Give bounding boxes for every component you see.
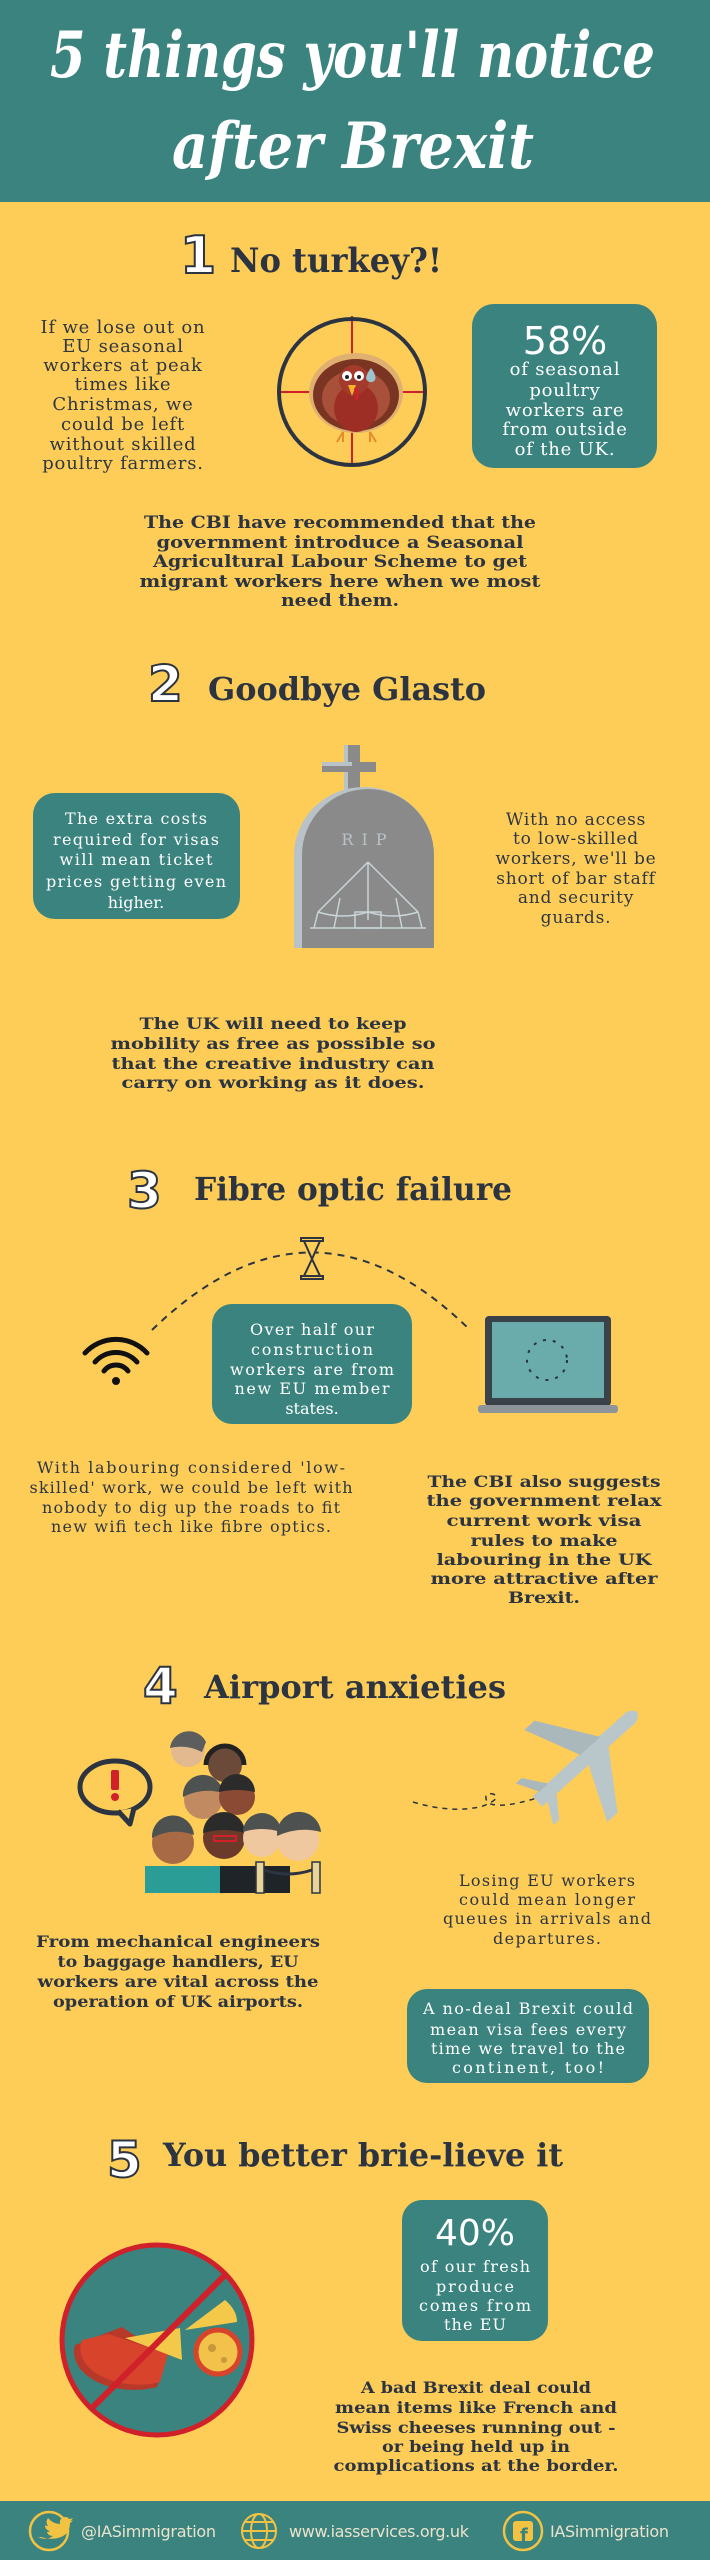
text: CBI work visa: labouring in the UK bbox=[436, 1550, 653, 1569]
icon: twitter bbox=[30, 2512, 73, 2550]
text: airport workers: From mechanical engineers bbox=[36, 1932, 320, 1951]
text: seasonal workers: workers at peak bbox=[43, 355, 203, 376]
title: after Brexit bbox=[172, 109, 534, 184]
text: labouring low-skilled: skilled' work, we could be left with bbox=[30, 1478, 352, 1497]
stat box: 40%: of our fresh bbox=[420, 2257, 530, 2276]
box: construction workers: workers are from bbox=[230, 1360, 394, 1379]
box: no-deal visa fees: A no-deal Brexit could bbox=[422, 1999, 633, 2018]
icon: airplane with dashed trail bbox=[413, 1666, 679, 1850]
section 5 heading bbox=[107, 2131, 563, 2189]
header banner bbox=[0, 0, 710, 202]
box: no-deal visa fees: mean visa fees every bbox=[430, 2020, 626, 2039]
section 2 heading: 2 bbox=[148, 655, 183, 713]
stat box: 58%: 58% bbox=[523, 319, 607, 363]
title bbox=[50, 18, 655, 184]
text: low-skilled workers: workers, we'll be bbox=[495, 849, 657, 869]
box: no-deal visa fees bbox=[407, 1989, 649, 2083]
text: CBI recommendation: migrant workers here when we most bbox=[140, 572, 541, 592]
text: low-skilled workers: With no access bbox=[506, 810, 646, 830]
section 1 heading: 1 bbox=[180, 226, 216, 286]
text: CBI recommendation: The CBI have recommended that the bbox=[144, 513, 536, 533]
text: cheese border: or being held up in bbox=[382, 2437, 570, 2456]
text: CBI work visa bbox=[426, 1472, 662, 1607]
text: airport workers: operation of UK airports. bbox=[53, 1992, 303, 2011]
text: low-skilled workers bbox=[495, 810, 657, 928]
stat box: 58% bbox=[472, 304, 657, 468]
text: CBI recommendation bbox=[140, 513, 541, 611]
text: low-skilled workers: short of bar staff bbox=[496, 869, 657, 889]
section 4 heading: Airport anxieties bbox=[203, 1668, 506, 1706]
text: seasonal workers: Christmas, we bbox=[52, 394, 194, 415]
text: labouring low-skilled: nobody to dig up the roads to fit bbox=[42, 1498, 341, 1517]
text: CBI work visa: rules to make bbox=[470, 1531, 618, 1550]
text: queues: queues in arrivals and bbox=[443, 1909, 651, 1928]
text: CBI work visa: current work visa bbox=[446, 1511, 642, 1530]
text: mobility: The UK will need to keep bbox=[140, 1014, 406, 1033]
text: airport workers: workers are vital across the bbox=[36, 1972, 319, 1991]
section 1 heading bbox=[180, 226, 442, 286]
text: mobility: that the creative industry can bbox=[112, 1054, 435, 1073]
section 2 heading: Goodbye Glasto bbox=[208, 670, 486, 708]
icon: tombstone bbox=[294, 745, 434, 948]
text: seasonal workers: could be left bbox=[61, 414, 185, 435]
text: cheese border bbox=[334, 2378, 618, 2475]
text: mobility bbox=[110, 1014, 436, 1092]
text: queues: Losing EU workers bbox=[459, 1871, 635, 1890]
text: CBI recommendation: government introduce a Seasonal bbox=[156, 533, 524, 553]
icon: group of people bbox=[145, 1731, 321, 1893]
text: cheese border: mean items like French and bbox=[335, 2398, 617, 2417]
box: visa costs bbox=[33, 793, 240, 919]
icon: facebook bbox=[504, 2512, 542, 2550]
text: labouring low-skilled bbox=[30, 1458, 352, 1536]
text: CBI work visa: Brexit. bbox=[508, 1588, 580, 1607]
section 5 heading: You better brie-lieve it bbox=[162, 2136, 563, 2174]
text: low-skilled workers: to low-skilled bbox=[513, 829, 639, 849]
text: seasonal workers: poultry farmers. bbox=[42, 453, 204, 474]
section 5 heading: 5 bbox=[107, 2131, 142, 2189]
text: queues: could mean longer bbox=[459, 1890, 635, 1909]
stat box: 40%: the EU bbox=[444, 2315, 506, 2334]
icon: wifi bbox=[85, 1339, 147, 1385]
text: seasonal workers: without skilled bbox=[50, 434, 196, 455]
text: mobility: mobility as free as possible so bbox=[110, 1034, 436, 1053]
icon: facebook: f bbox=[520, 2525, 528, 2546]
box: construction workers: new EU member bbox=[234, 1379, 390, 1398]
text: seasonal workers: If we lose out on bbox=[41, 317, 205, 338]
section 4 heading: 4 bbox=[143, 1657, 178, 1715]
box: construction workers: Over half our bbox=[250, 1320, 374, 1339]
section 2 heading bbox=[148, 655, 486, 713]
stat box: 40%: produce bbox=[436, 2277, 514, 2296]
text: seasonal workers: EU seasonal bbox=[62, 336, 184, 357]
section 4 heading bbox=[143, 1657, 506, 1715]
icon: speech bubble bbox=[80, 1761, 150, 1824]
text: low-skilled workers: guards. bbox=[541, 908, 611, 928]
text: cheese border: Swiss cheeses running out - bbox=[336, 2418, 616, 2437]
box: construction workers: states. bbox=[285, 1399, 339, 1418]
stat box: 40%: comes from bbox=[419, 2296, 531, 2315]
section 3 heading: Fibre optic failure bbox=[194, 1170, 512, 1208]
stat box: 58%: of the UK. bbox=[515, 439, 615, 460]
text: CBI work visa: The CBI also suggests bbox=[428, 1472, 660, 1491]
text: cheese border: A bad Brexit deal could bbox=[360, 2378, 591, 2397]
icon: turkey in crosshair bbox=[277, 316, 427, 467]
text: queues: departures. bbox=[493, 1929, 601, 1948]
box: visa costs: required for visas bbox=[53, 830, 219, 849]
icon: tombstone: RIP bbox=[341, 830, 395, 849]
text: CBI work visa: the government relax bbox=[426, 1491, 662, 1510]
section 3 heading: 3 bbox=[127, 1162, 162, 1220]
text: CBI recommendation: Agricultural Labour Scheme to get bbox=[152, 552, 527, 572]
text: mobility: carry on working as it does. bbox=[122, 1073, 424, 1092]
footer: www.iasservices.org.uk bbox=[289, 2522, 470, 2541]
section 3 heading bbox=[127, 1162, 512, 1220]
stat box: 40%: 40% bbox=[435, 2213, 515, 2254]
footer: @IASimmigration bbox=[81, 2522, 216, 2541]
stat box: 58%: workers are bbox=[506, 400, 624, 421]
text: seasonal workers bbox=[41, 317, 205, 474]
stat box: 58%: of seasonal bbox=[510, 359, 620, 380]
footer bbox=[0, 2501, 710, 2560]
box: construction workers bbox=[212, 1304, 412, 1424]
stat box: 58%: from outside bbox=[502, 419, 628, 440]
dashed arc bbox=[152, 1252, 470, 1330]
text: labouring low-skilled: new wifi tech like fibre optics. bbox=[51, 1517, 331, 1536]
text: low-skilled workers: and security bbox=[518, 888, 634, 908]
box: visa costs: The extra costs bbox=[65, 809, 207, 828]
text: airport workers: to baggage handlers, EU bbox=[58, 1952, 299, 1971]
icon: banned cheese bbox=[62, 2245, 252, 2435]
box: visa costs: will mean ticket bbox=[60, 850, 213, 869]
box: no-deal visa fees: time we travel to the bbox=[431, 2039, 625, 2058]
text: airport workers bbox=[36, 1932, 320, 2011]
footer: IASimmigration bbox=[550, 2522, 669, 2541]
text: seasonal workers: times like bbox=[75, 374, 171, 395]
text: queues bbox=[443, 1871, 651, 1948]
text: CBI work visa: more attractive after bbox=[430, 1569, 658, 1588]
box: no-deal visa fees: continent, too! bbox=[452, 2058, 604, 2077]
stat box: 40% bbox=[402, 2200, 548, 2341]
icon: hourglass bbox=[301, 1238, 323, 1279]
text: cheese border: complications at the border. bbox=[334, 2456, 618, 2475]
icon: globe bbox=[242, 2514, 276, 2548]
icon: laptop bbox=[478, 1316, 618, 1413]
text: CBI recommendation: need them. bbox=[281, 591, 399, 611]
box: visa costs: higher. bbox=[108, 893, 164, 912]
section 1 heading: No turkey?! bbox=[230, 241, 442, 281]
box: construction workers: construction bbox=[251, 1340, 373, 1359]
stat box: 58%: poultry bbox=[529, 380, 601, 401]
box: visa costs: prices getting even bbox=[46, 872, 226, 891]
text: labouring low-skilled: With labouring considered 'low- bbox=[37, 1458, 345, 1477]
